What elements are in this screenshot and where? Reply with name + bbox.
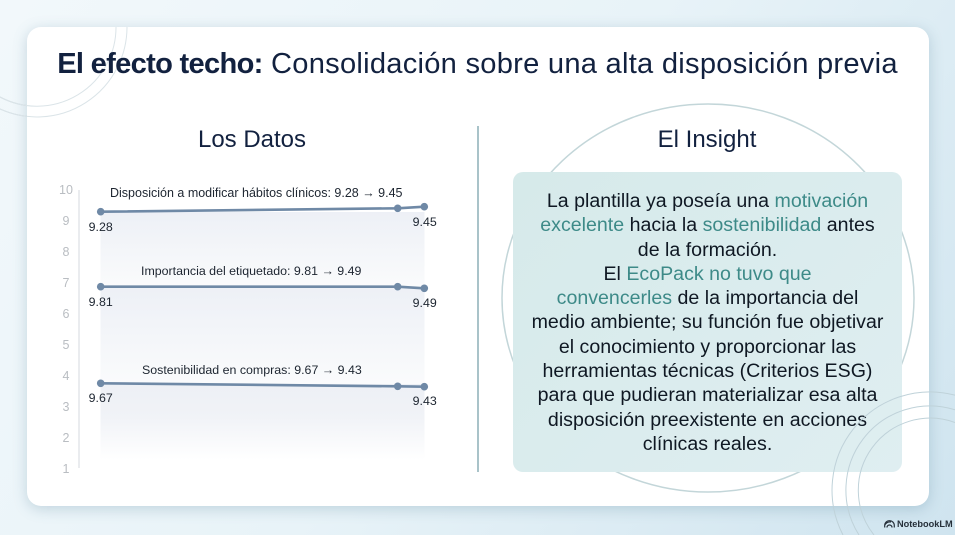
insight text: excelente hacia la sostenibilidad antes — [540, 214, 875, 236]
insight text: El EcoPack no tuvo que — [603, 263, 812, 285]
insight text: clínicas reales. — [643, 433, 772, 455]
series: Importancia del etiquetado: 9.49 — [413, 296, 437, 310]
series: Sostenibilidad en compras — [89, 363, 437, 408]
series: Disposición a modificar hábitos clínicos — [89, 186, 437, 234]
insight text: convencerles de la importancia del — [557, 287, 858, 309]
line chart: 1 — [63, 462, 70, 476]
insight text: La plantilla ya poseía una motivación — [547, 190, 868, 212]
insight text: disposición preexistente en acciones — [548, 409, 867, 431]
insight panel — [513, 172, 902, 472]
line chart: 6 — [63, 307, 70, 321]
heading: El Insight: El Insight — [658, 126, 756, 153]
insight text: el conocimiento y proporcionar las — [559, 336, 856, 358]
series: Sostenibilidad en compras: Sostenibilidad en compras: 9.67 → 9.43 — [142, 363, 362, 377]
insight text: herramientas técnicas (Criterios ESG) — [543, 360, 872, 382]
line chart: 10 — [59, 183, 73, 197]
divider — [477, 126, 479, 472]
line chart — [59, 183, 437, 476]
series: Importancia del etiquetado — [89, 264, 437, 310]
icon: NotebookLM logo — [884, 520, 895, 528]
insight text — [532, 190, 884, 455]
series: Importancia del etiquetado: 9.81 — [89, 295, 113, 309]
title: El efecto techo: Consolidación sobre una alta disposición previa — [57, 48, 898, 80]
line chart: 9 — [63, 214, 70, 228]
brand label: NotebookLM — [897, 519, 953, 529]
series: Disposición a modificar hábitos clínicos: Disposición a modificar hábitos clínicos: 9.28 → 9.45 — [110, 186, 403, 200]
line chart: 2 — [63, 431, 70, 445]
insight text: de la formación. — [638, 239, 777, 261]
heading: Los Datos: Los Datos — [198, 126, 306, 153]
series: Sostenibilidad en compras: 9.67 — [89, 391, 113, 405]
series: Disposición a modificar hábitos clínicos: 9.28 — [89, 220, 113, 234]
insight text: para que pudieran materializar esa alta — [538, 384, 877, 406]
insight text: medio ambiente; su función fue objetivar — [532, 311, 883, 333]
line chart: 4 — [63, 369, 70, 383]
line chart: 3 — [63, 400, 70, 414]
series: Sostenibilidad en compras: 9.43 — [413, 394, 437, 408]
series: Importancia del etiquetado: Importancia del etiquetado: 9.81 → 9.49 — [141, 264, 362, 278]
line chart: 5 — [63, 338, 70, 352]
line chart: 8 — [63, 245, 70, 259]
series: Disposición a modificar hábitos clínicos: 9.45 — [413, 215, 437, 229]
line chart: 7 — [63, 276, 70, 290]
